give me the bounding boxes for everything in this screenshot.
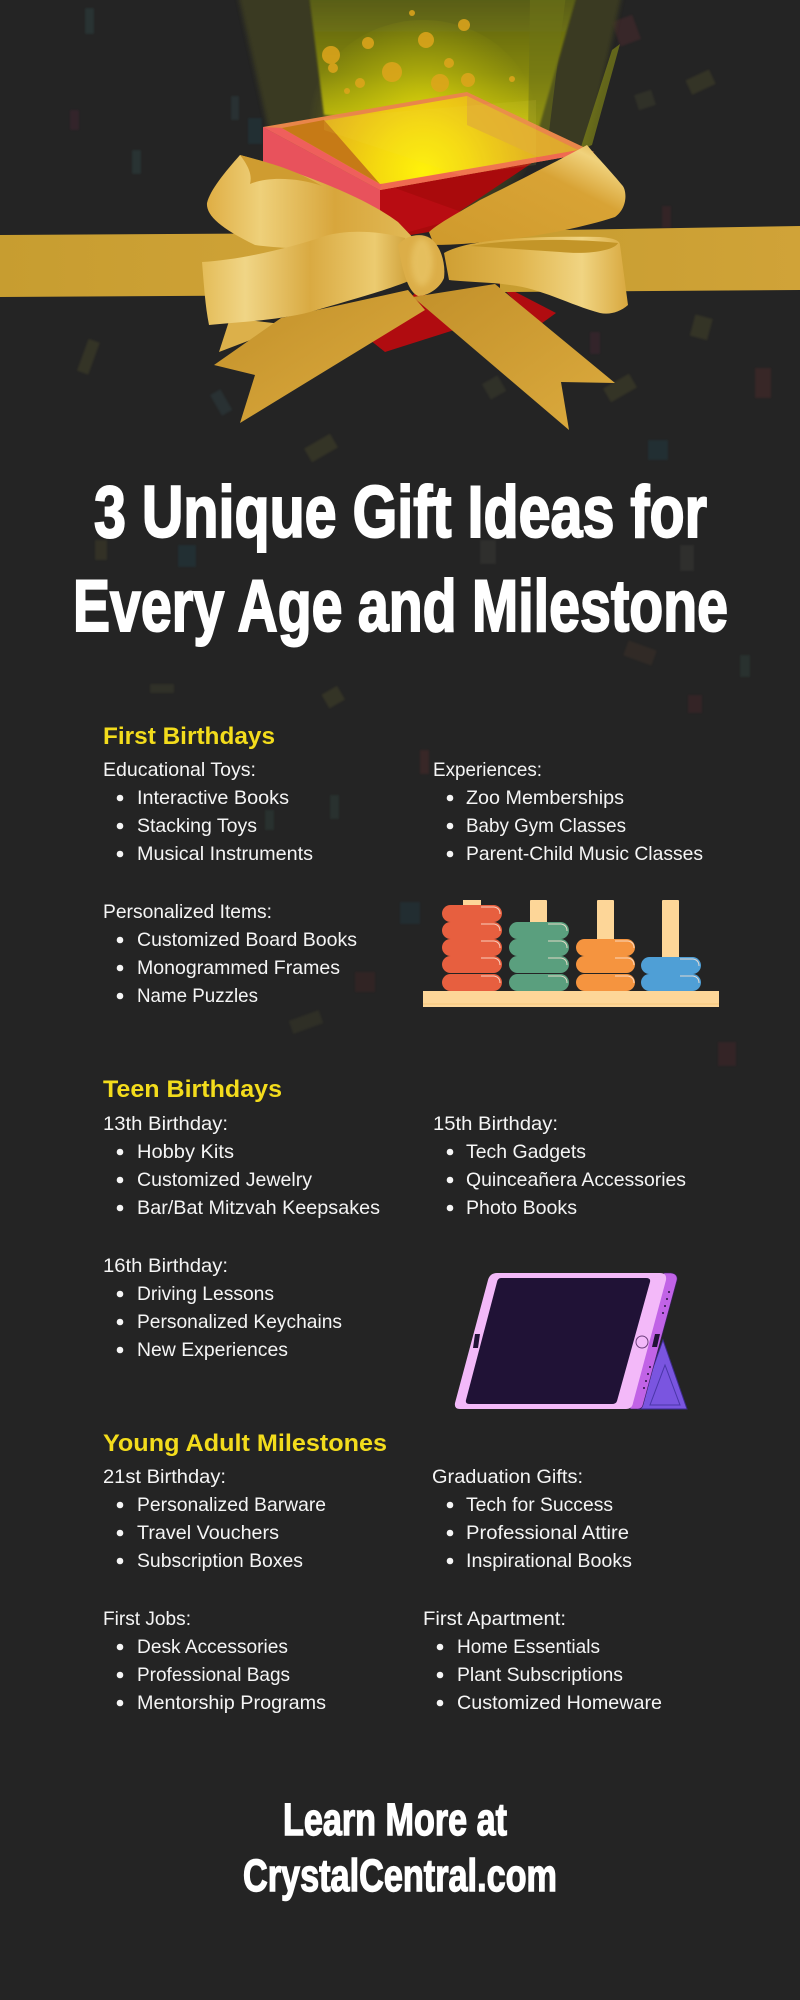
central beam xyxy=(309,0,577,138)
list: Experiences: Zoo Memberships xyxy=(466,787,624,809)
loop: lower left xyxy=(202,232,418,325)
list: 13th Birthday: Customized Jewelry xyxy=(137,1169,312,1191)
list: Personalized Items xyxy=(103,901,357,1007)
list: 16th Birthday: 16th Birthday: xyxy=(103,1255,228,1277)
light beams rising from box xyxy=(238,0,622,230)
loop: lower right xyxy=(444,237,628,314)
list: First Jobs: Professional Bags xyxy=(137,1664,290,1686)
list: 16th Birthday: New Experiences xyxy=(137,1339,288,1361)
list: Experiences: Parent-Child Music Classes xyxy=(466,843,703,865)
list: Graduation Gifts xyxy=(432,1466,632,1572)
section: Teen Birthdays xyxy=(103,1076,687,1409)
list: 21st Birthday: Personalized Barware xyxy=(137,1494,326,1516)
section: First Birthdays xyxy=(103,723,719,1007)
list: Educational Toys xyxy=(103,759,313,865)
central glow xyxy=(308,20,538,230)
list: Educational Toys: Musical Instruments xyxy=(137,843,313,865)
box rim xyxy=(263,92,594,190)
outer beams xyxy=(238,0,622,148)
tail: small left xyxy=(219,318,290,352)
list: 13th Birthday: 13th Birthday: xyxy=(103,1113,228,1135)
list: Experiences: Experiences: xyxy=(433,759,542,781)
tail: left xyxy=(214,290,425,423)
list: 15th Birthday: Tech Gadgets xyxy=(466,1141,586,1163)
list: 21st Birthday: Travel Vouchers xyxy=(137,1522,279,1544)
list: 13th Birthday: Bar/Bat Mitzvah Keepsakes xyxy=(137,1197,380,1219)
heading: First Birthdays xyxy=(103,723,275,750)
list: First Apartment: Customized Homeware xyxy=(457,1692,662,1714)
list: 21st Birthday xyxy=(103,1466,326,1572)
list: First Apartment xyxy=(423,1608,662,1714)
icon: tablet xyxy=(455,1273,687,1409)
sparkles xyxy=(322,10,515,94)
heading: Young Adult Milestones xyxy=(103,1430,387,1457)
list: 15th Birthday: 15th Birthday: xyxy=(433,1113,558,1135)
section: Young Adult Milestones xyxy=(103,1430,662,1714)
list: Personalized Items: Monogrammed Frames xyxy=(137,957,340,979)
list: Experiences xyxy=(433,759,703,865)
list: 13th Birthday: Hobby Kits xyxy=(137,1141,234,1163)
list: First Jobs: Mentorship Programs xyxy=(137,1692,326,1714)
box interior xyxy=(282,96,578,184)
list: 16th Birthday: Driving Lessons xyxy=(137,1283,274,1305)
list: Experiences: Baby Gym Classes xyxy=(466,815,626,837)
list: 15th Birthday: Quinceañera Accessories xyxy=(466,1169,686,1191)
list: Personalized Items: Name Puzzles xyxy=(137,985,258,1007)
title xyxy=(73,472,728,647)
list: 16th Birthday xyxy=(103,1255,342,1361)
heading: Teen Birthdays xyxy=(103,1076,282,1103)
icon: stacking toy xyxy=(423,900,719,1007)
list: Graduation Gifts: Tech for Success xyxy=(466,1494,613,1516)
bow knot xyxy=(398,235,444,296)
list: First Jobs xyxy=(103,1608,326,1714)
list: First Apartment: Plant Subscriptions xyxy=(457,1664,623,1686)
confetti background xyxy=(70,0,771,1066)
list: Personalized Items: Customized Board Books xyxy=(137,929,357,951)
list: First Jobs: First Jobs: xyxy=(103,1608,191,1630)
gift box xyxy=(263,92,594,352)
list: First Apartment: First Apartment: xyxy=(423,1608,566,1630)
list: First Jobs: Desk Accessories xyxy=(137,1636,288,1658)
footer call to action: Learn More at xyxy=(283,1794,507,1845)
gold bow xyxy=(202,145,628,430)
list: 21st Birthday: 21st Birthday: xyxy=(103,1466,226,1488)
list: Graduation Gifts: Inspirational Books xyxy=(466,1550,632,1572)
list: 15th Birthday: Photo Books xyxy=(466,1197,577,1219)
gold ribbon band xyxy=(0,226,800,297)
footer call to action: CrystalCentral.com xyxy=(243,1850,557,1901)
list: Educational Toys: Interactive Books xyxy=(137,787,289,809)
list: First Apartment: Home Essentials xyxy=(457,1636,600,1658)
list: 15th Birthday xyxy=(433,1113,686,1219)
list: Personalized Items: Personalized Items: xyxy=(103,901,272,923)
list: Educational Toys: Educational Toys: xyxy=(103,759,256,781)
list: Graduation Gifts: Graduation Gifts: xyxy=(432,1466,583,1488)
list: 16th Birthday: Personalized Keychains xyxy=(137,1311,342,1333)
loop: top left xyxy=(207,155,420,249)
tail: right xyxy=(413,284,615,430)
list: 13th Birthday xyxy=(103,1113,380,1219)
list: Graduation Gifts: Professional Attire xyxy=(466,1522,629,1544)
list: 21st Birthday: Subscription Boxes xyxy=(137,1550,303,1572)
footer call to action xyxy=(243,1794,557,1901)
box red walls xyxy=(263,127,380,240)
list: Educational Toys: Stacking Toys xyxy=(137,815,257,837)
loop: top right xyxy=(429,145,625,245)
